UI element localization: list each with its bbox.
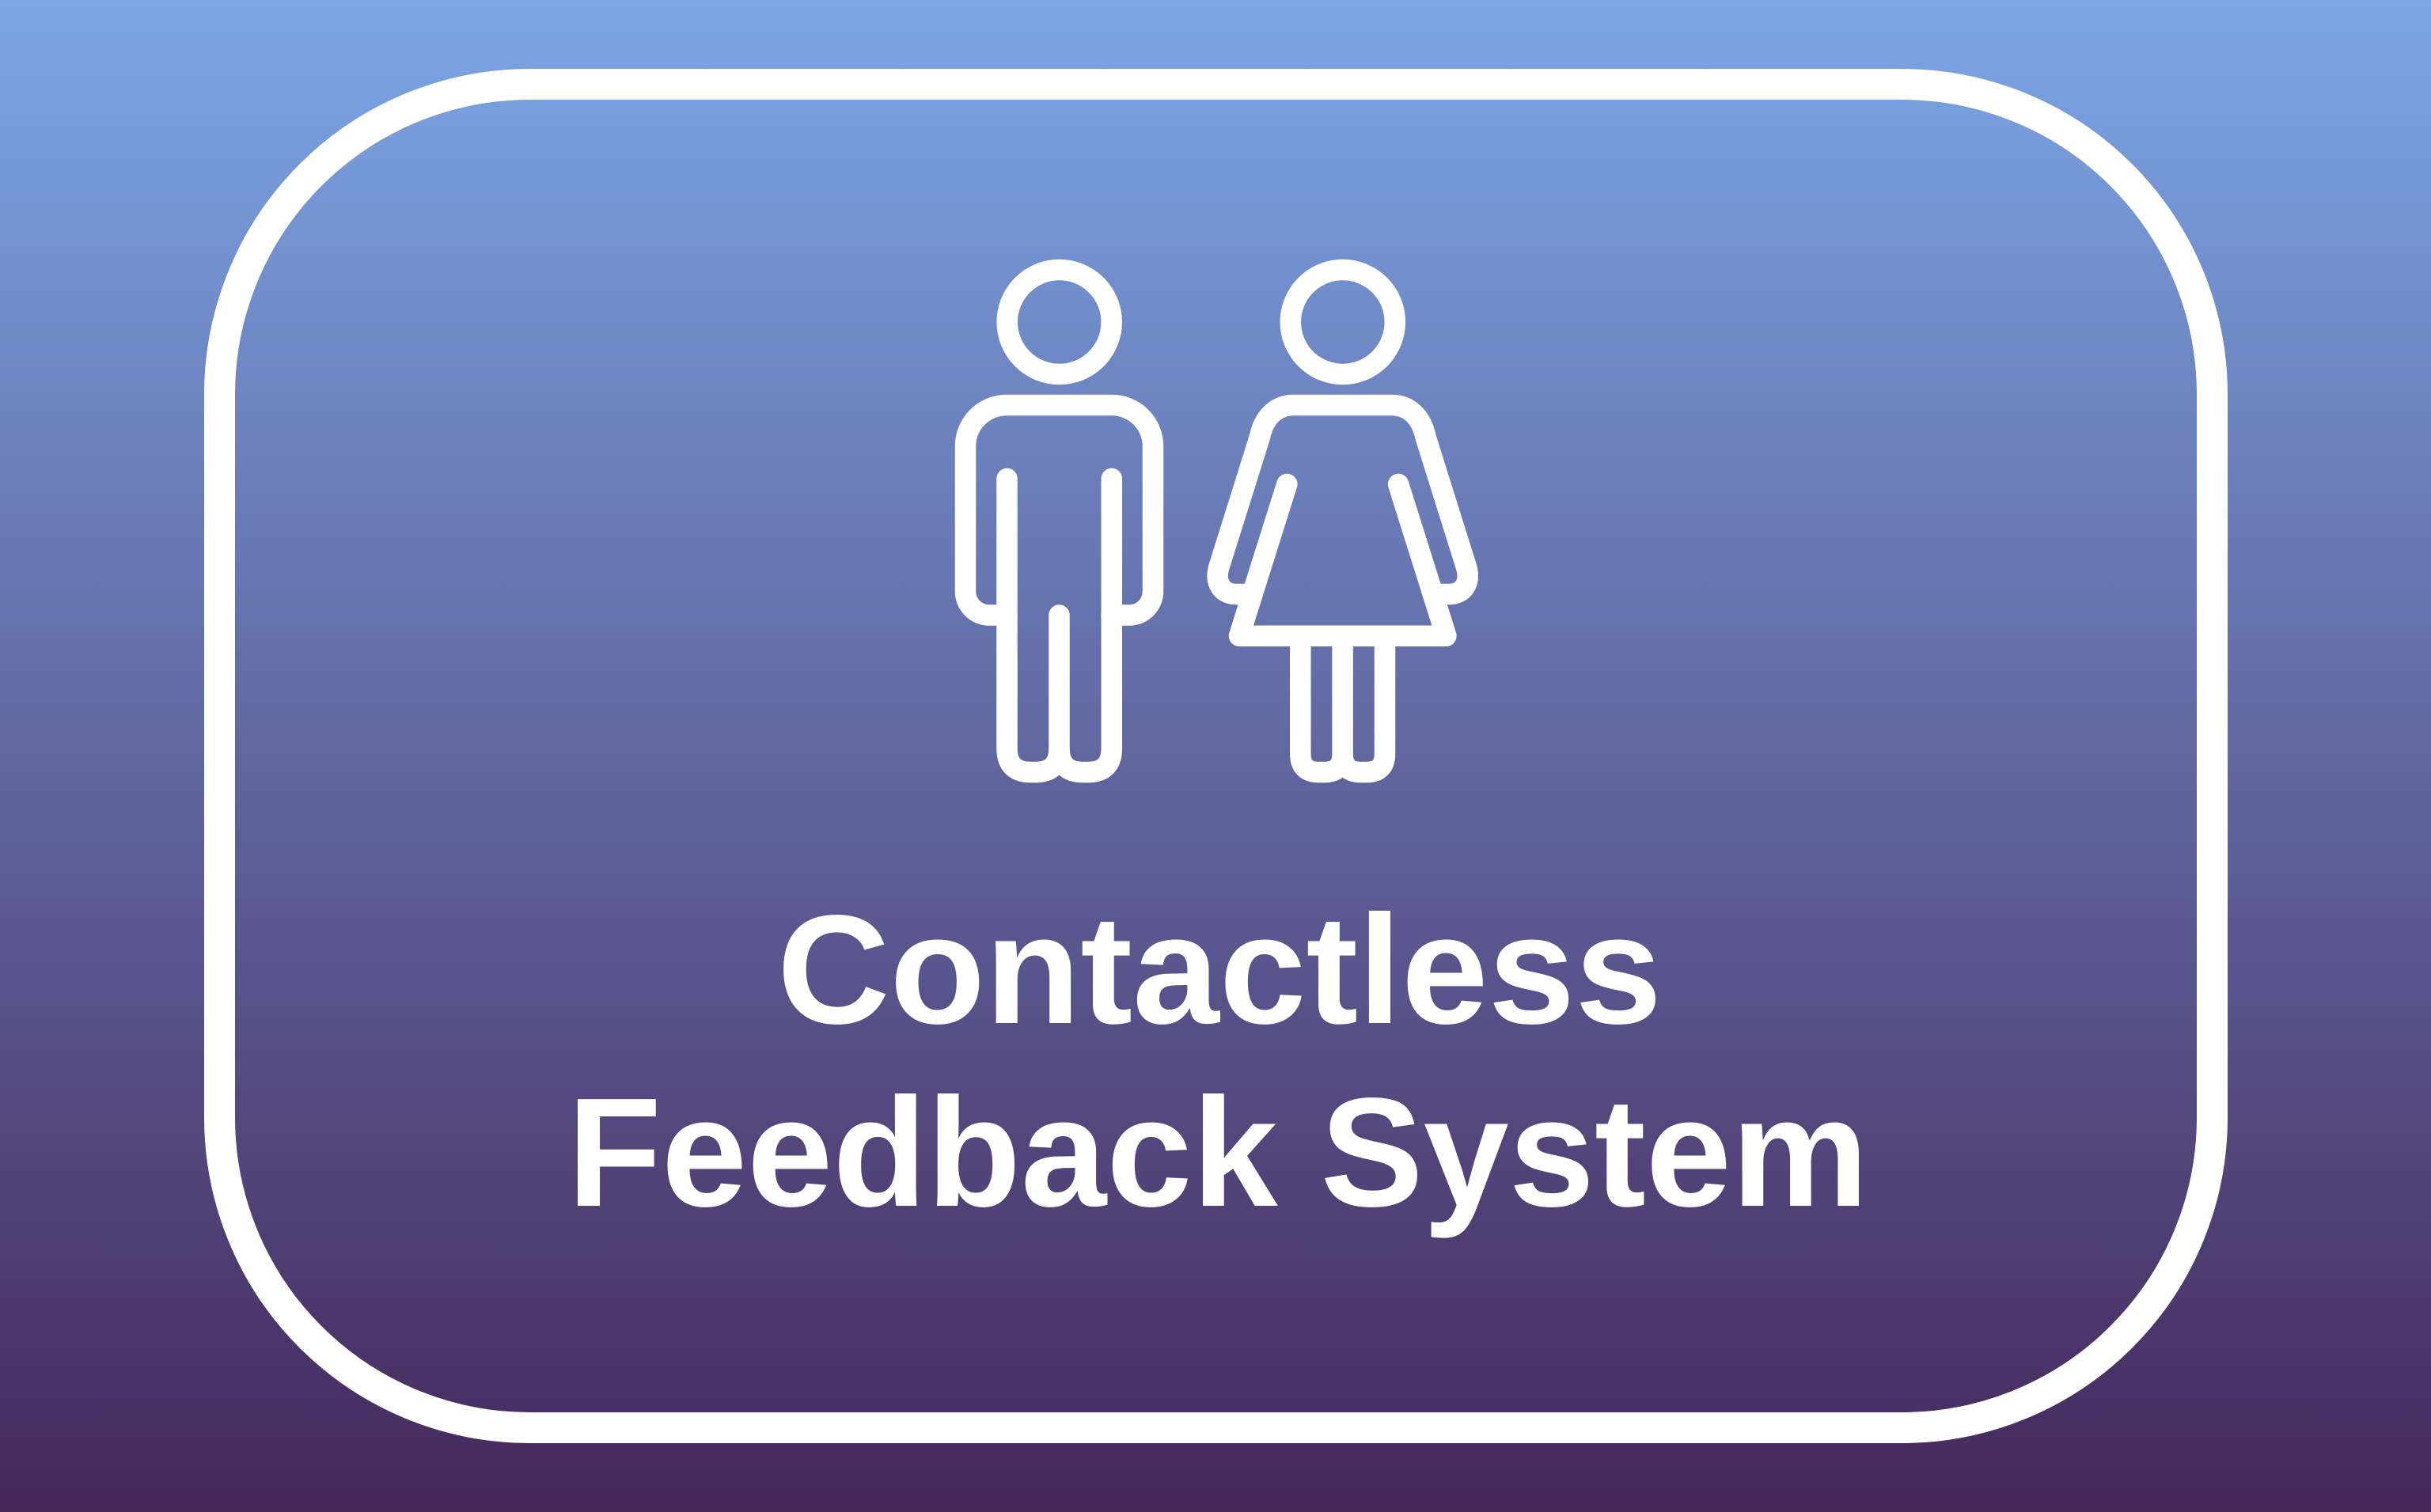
title [567,883,1868,1239]
title line 1: Contactless [777,883,1662,1056]
icon: woman [1218,270,1468,772]
icon: man and woman outline figures [965,270,1468,772]
icon: man [965,270,1153,772]
title line 2: Feedback System [567,1066,1868,1239]
panel: rounded white frame [220,84,2213,1427]
